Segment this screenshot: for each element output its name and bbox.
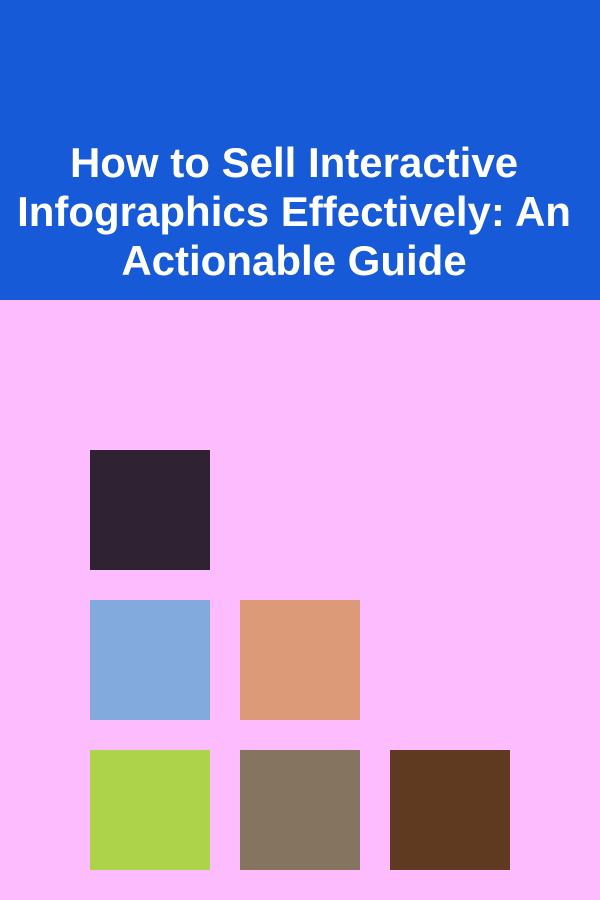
header band	[0, 0, 600, 300]
swatch: lime green	[90, 750, 210, 870]
swatch: salmon	[240, 600, 360, 720]
title: Infographics Effectively: An	[17, 188, 571, 235]
title	[17, 139, 571, 284]
title: Actionable Guide	[121, 237, 467, 284]
swatch: taupe	[240, 750, 360, 870]
swatch: brown	[390, 750, 510, 870]
swatch: light blue	[90, 600, 210, 720]
swatch: dark plum	[90, 450, 210, 570]
title: How to Sell Interactive	[70, 139, 518, 186]
